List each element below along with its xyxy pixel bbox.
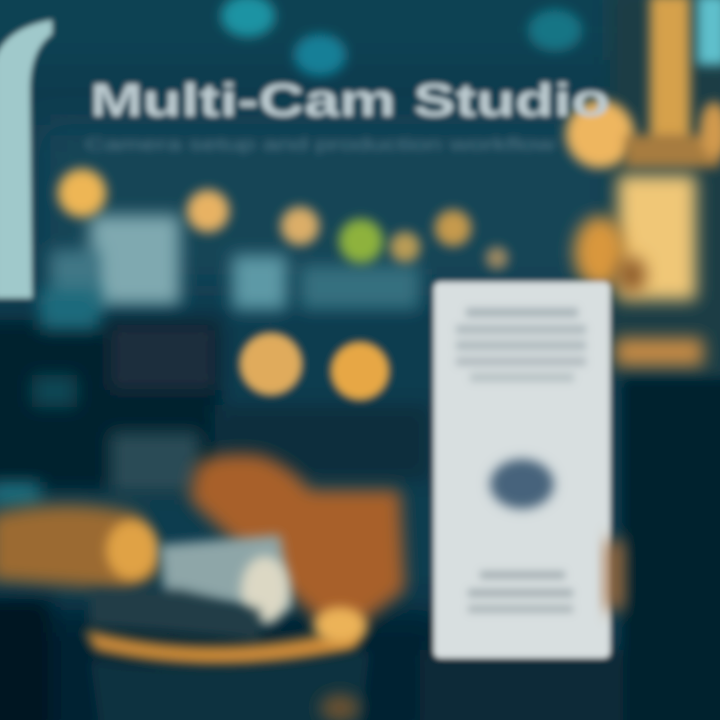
panel: right warm light structure xyxy=(566,0,720,380)
subtitle: Camera setup and production workflow xyxy=(85,135,556,154)
panel: orange glow beside card xyxy=(606,540,624,610)
card text lines xyxy=(456,308,586,382)
panel: white document card xyxy=(434,282,610,658)
icons: teal ceiling lights xyxy=(221,0,582,76)
panel: dark right column xyxy=(622,378,720,720)
icons: large warm lights xyxy=(240,333,389,400)
panel: left curved light column xyxy=(0,20,52,298)
icon: foreground bowl and warm objects xyxy=(0,454,405,720)
title: Multi-Cam Studio xyxy=(90,74,610,126)
card footer text xyxy=(468,571,573,613)
card icon xyxy=(490,459,554,509)
icons: row of glowing lights xyxy=(58,169,508,269)
